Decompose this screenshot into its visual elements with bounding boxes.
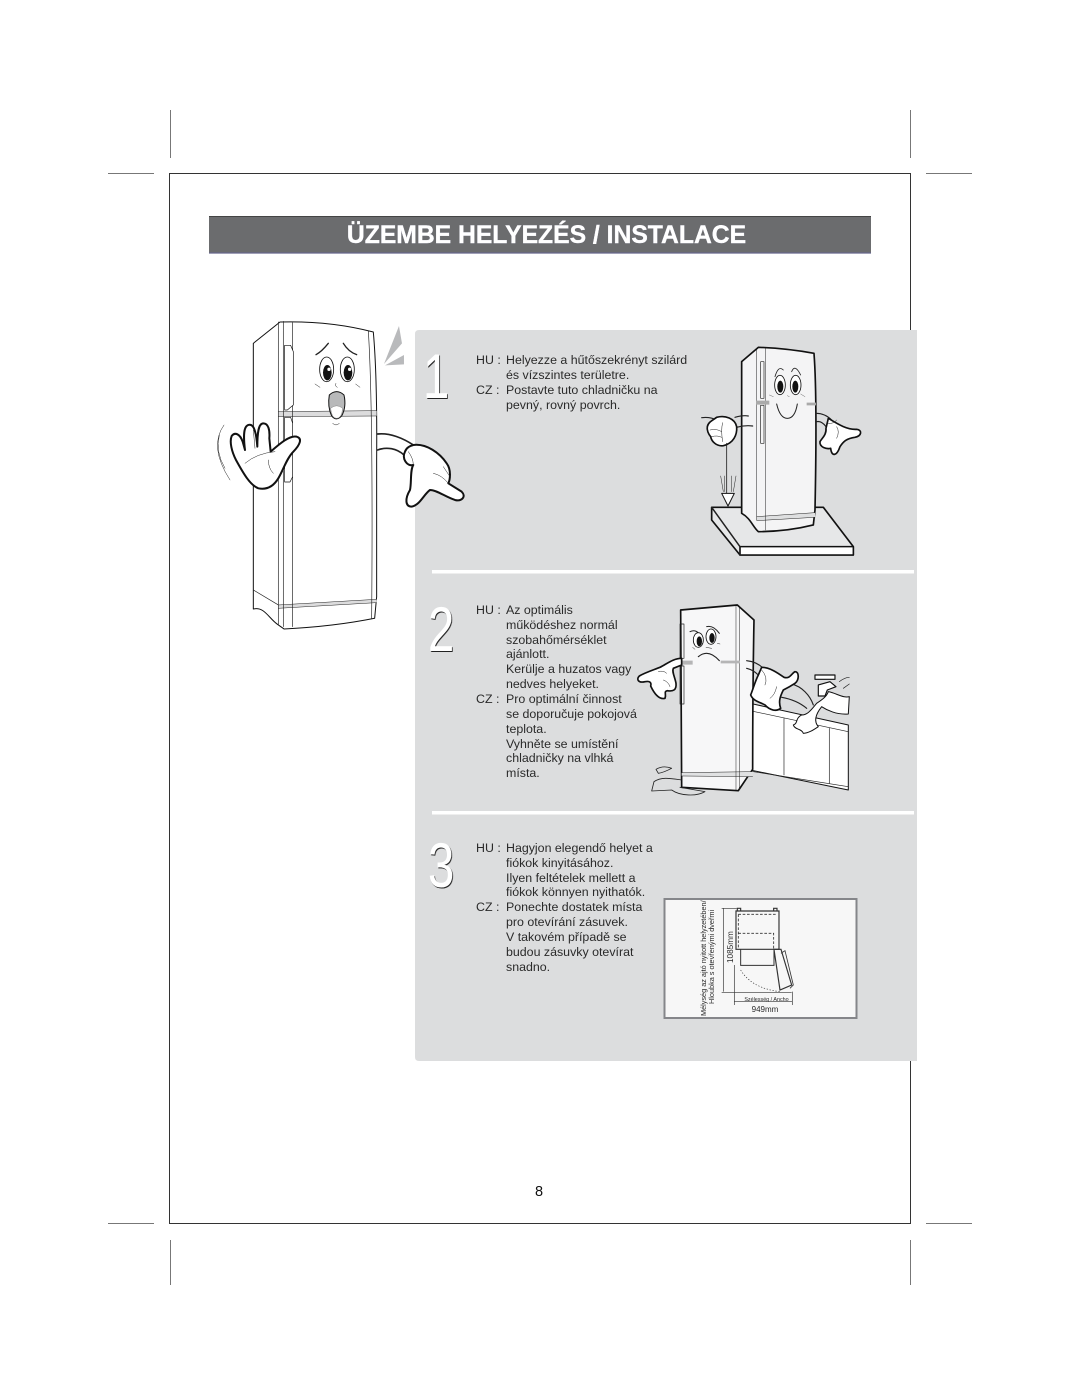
door handles [285, 345, 293, 482]
step 2 text: Pro optimální činnost [506, 692, 622, 706]
exclamation marks [384, 326, 404, 365]
smiling face [769, 368, 805, 418]
step 1 [423, 341, 687, 412]
page number: 8 [535, 1184, 543, 1200]
illustration: surprised fridge [217, 321, 464, 629]
number 3: 3 [428, 830, 454, 901]
illustration: unhappy fridge near sink [638, 605, 849, 795]
step 2 text: HU : [476, 603, 501, 617]
step 2 text: chladničky na vlhká [506, 751, 614, 765]
step 3 text: Hagyjon elegendő helyet a [506, 841, 653, 855]
step 3 text: Ponechte dostatek místa [506, 900, 642, 914]
step 2 text: működéshez normál [506, 618, 618, 632]
number 1: 1 [423, 341, 449, 412]
step 1 text [476, 353, 687, 412]
step 3 text: CZ : [476, 900, 499, 914]
left hand holding plumb line [702, 416, 753, 427]
step 1 text: CZ : [476, 383, 499, 397]
illustration: happy fridge on level base [702, 347, 861, 555]
step 2 text: Vyhněte se umístění [506, 737, 619, 751]
level platform [712, 507, 853, 555]
step 1 text: és vízszintes területre. [506, 368, 629, 382]
step 1 text: pevný, rovný povrch. [506, 398, 620, 412]
right pointing hand [816, 413, 832, 427]
step 3 text: Ilyen feltételek mellett a [506, 871, 636, 885]
right hand over sink [747, 661, 763, 675]
title banner: ÜZEMBE HELYEZÉS / INSTALACE [347, 221, 746, 249]
clearance diagram: Hloubka s otevřenými dveřmi [707, 910, 716, 1004]
title banner [209, 216, 871, 253]
step 3 [428, 830, 653, 974]
waving left hand [231, 423, 300, 489]
grey instruction panel [415, 330, 917, 1061]
left pointing hand [638, 658, 682, 699]
step 2 text: Az optimális [506, 603, 573, 617]
number 2: 2 [428, 594, 454, 665]
width labels: Szélesség / Ancho [744, 997, 789, 1003]
step 3 text: HU : [476, 841, 501, 855]
step 2 text: nedves helyeket. [506, 677, 599, 691]
step 2 text [476, 603, 637, 780]
page frame [170, 174, 910, 1224]
step 3 text: fiókok könnyen nyithatók. [506, 885, 645, 899]
divider [432, 570, 914, 574]
step 1 text: Postavte tuto chladničku na [506, 383, 658, 397]
pointing right hand [378, 434, 413, 455]
step 2 text: ajánlott. [506, 647, 549, 661]
divider [432, 811, 914, 814]
sink cabinet [750, 703, 848, 790]
rotated depth labels: Mélység az ajtó nyitott helyzetében/ [699, 899, 708, 1016]
step 2 [428, 594, 637, 780]
water on floor [652, 767, 705, 795]
step 1 text: Helyezze a hűtőszekrényt szilárd [506, 353, 687, 367]
fridge body [253, 322, 377, 629]
fridge body [742, 347, 816, 532]
fridge plan [722, 908, 793, 1005]
step 2 text: teplota. [506, 722, 547, 736]
step 2 text: místa. [506, 766, 540, 780]
step 2 text: CZ : [476, 692, 499, 706]
clearance diagram [664, 899, 856, 1018]
clearance diagram: 949mm [752, 1005, 779, 1014]
step 2 text: Kerülje a huzatos vagy [506, 662, 632, 676]
step 3 text: V takovém případě se [506, 930, 627, 944]
face [315, 343, 360, 425]
plumb line and bob [725, 443, 728, 493]
step 3 text: snadno. [506, 960, 550, 974]
water tap and splash [782, 675, 849, 733]
clearance diagram: 1085mm [726, 931, 735, 963]
step 3 text: fiókok kinyitásához. [506, 856, 613, 870]
step 3 text: pro otevírání zásuvek. [506, 915, 628, 929]
step 3 text [476, 841, 653, 974]
step 2 text: szobahőmérséklet [506, 633, 607, 647]
sad face [690, 626, 720, 661]
step 1 text: HU : [476, 353, 501, 367]
step 2 text: se doporučuje pokojová [506, 707, 637, 721]
step 3 text: budou zásuvky otevírat [506, 945, 634, 959]
fridge body [681, 605, 754, 791]
